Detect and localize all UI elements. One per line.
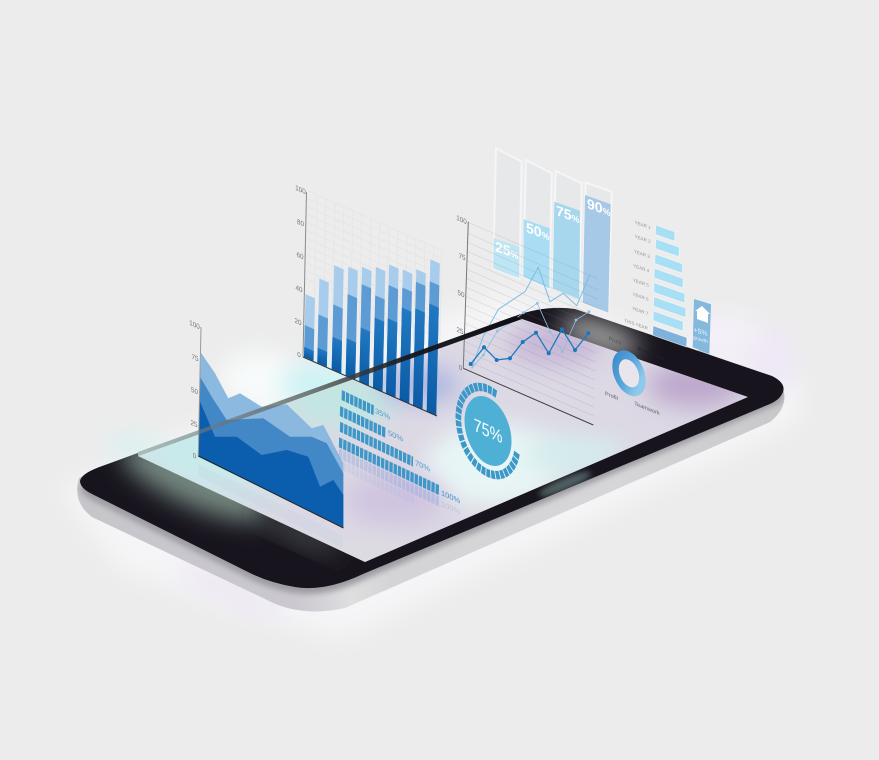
label teamwork: Teamwork — [634, 401, 660, 417]
area chart axis labels: 75 — [192, 353, 199, 364]
area chart axis labels: 25 — [191, 419, 198, 430]
percent columns — [493, 148, 612, 313]
bar chart axis labels: 60 — [297, 251, 304, 262]
progress reflection — [339, 454, 439, 501]
bar chart — [295, 185, 442, 416]
panel background — [693, 299, 711, 354]
body shade — [78, 391, 784, 597]
bar 1 — [304, 294, 315, 361]
column 75% — [553, 171, 582, 299]
progress reflection faint — [339, 464, 415, 500]
column 90%: 90% — [587, 196, 611, 220]
label profit top: Profit — [608, 336, 622, 347]
icon: house — [695, 306, 710, 323]
bar 9 — [413, 269, 426, 410]
year 4: YEAR 4 — [633, 263, 650, 274]
year 1: YEAR 1 — [634, 220, 651, 230]
bar chart axis labels: 80 — [297, 218, 304, 229]
light area — [198, 353, 343, 527]
bar chart grid — [305, 191, 442, 357]
line chart axis labels: 50 — [458, 289, 465, 300]
bar chart axis labels: 100 — [295, 185, 306, 196]
line chart y axis — [463, 222, 468, 368]
column 25% — [493, 148, 522, 278]
label profit bottom: Profit — [605, 391, 618, 402]
bar series — [304, 204, 440, 416]
light series — [472, 267, 590, 368]
bar 7 — [386, 264, 399, 398]
year 3: YEAR 3 — [634, 249, 650, 259]
bar chart axis labels — [295, 185, 306, 360]
area chart axis labels: 50 — [191, 386, 198, 397]
label investment: Investment — [638, 346, 665, 363]
line chart axis labels — [456, 215, 467, 373]
medium series — [472, 302, 590, 368]
gauge 75% — [458, 376, 517, 486]
bar 8 — [400, 269, 412, 404]
bar chart y axis — [303, 192, 306, 357]
line chart grid — [464, 222, 598, 416]
line chart — [456, 215, 598, 425]
column 75%: 75% — [556, 203, 580, 227]
glow halo around phone — [60, 290, 800, 640]
progress row 35% — [342, 395, 374, 410]
bar 4 — [346, 267, 358, 380]
year 7: YEAR 7 — [632, 306, 649, 316]
progress row 70% — [340, 427, 413, 462]
area chart axis labels: 0 — [193, 452, 196, 461]
bar 5 — [359, 267, 372, 386]
bar 3 — [332, 265, 344, 373]
column 90% — [583, 183, 612, 313]
column 25%: 25% — [495, 239, 519, 263]
area chart y axis — [198, 327, 201, 456]
growth caption: growth — [693, 335, 708, 345]
growth value: +5% — [693, 326, 708, 338]
area chart — [189, 320, 344, 528]
chart reflection on screen — [198, 464, 343, 548]
label 35%: 35% — [375, 406, 390, 422]
screen — [138, 319, 748, 562]
gauge segment ring — [458, 376, 517, 486]
column 50%: 50% — [526, 220, 550, 244]
this year: THIS YEAR — [624, 318, 649, 331]
growth panel — [693, 299, 711, 354]
year bars — [624, 218, 687, 347]
bar 10 — [427, 259, 440, 416]
dark area — [198, 400, 343, 527]
donut chart — [605, 336, 665, 417]
phone — [77, 308, 784, 611]
donut centre — [619, 355, 639, 391]
bar chart baseline — [303, 357, 437, 416]
label reflection: 100% — [441, 499, 460, 517]
progress row 100% — [339, 442, 439, 490]
label 50%: 50% — [388, 428, 403, 444]
line chart axis labels: 25 — [457, 326, 464, 337]
label 70%: 70% — [415, 458, 430, 474]
area chart axis labels — [189, 320, 200, 461]
bar 6 — [373, 267, 385, 392]
dark series — [469, 327, 590, 366]
bar chart axis labels: 0 — [297, 351, 301, 360]
bar 2 — [317, 278, 329, 367]
gauge value: 75% — [474, 415, 502, 448]
phone silver body — [77, 350, 784, 611]
line chart axis labels: 0 — [459, 364, 462, 373]
label 100%: 100% — [441, 488, 460, 506]
top edge backing — [138, 316, 522, 456]
bar chart axis labels: 40 — [296, 284, 303, 295]
line chart axis labels: 75 — [459, 252, 466, 263]
area chart baseline — [198, 456, 344, 528]
mid area — [198, 377, 343, 527]
year 6: YEAR 6 — [632, 291, 649, 302]
phone top edge overlay — [138, 316, 522, 456]
progress bars on screen — [339, 395, 460, 517]
year 2: YEAR 2 — [634, 234, 651, 244]
line chart baseline — [463, 368, 593, 425]
donut ring — [616, 350, 642, 397]
progress row 50% — [340, 411, 386, 433]
screen colour wash — [130, 325, 743, 569]
year 5: YEAR 5 — [633, 277, 649, 288]
bar chart axis labels: 20 — [295, 317, 302, 328]
bezel lighting — [112, 308, 645, 560]
column 50% — [523, 160, 552, 288]
gauge disc — [464, 387, 512, 475]
area chart axis labels: 100 — [189, 320, 200, 331]
phone black face — [80, 308, 784, 588]
line chart axis labels: 100 — [456, 215, 467, 226]
